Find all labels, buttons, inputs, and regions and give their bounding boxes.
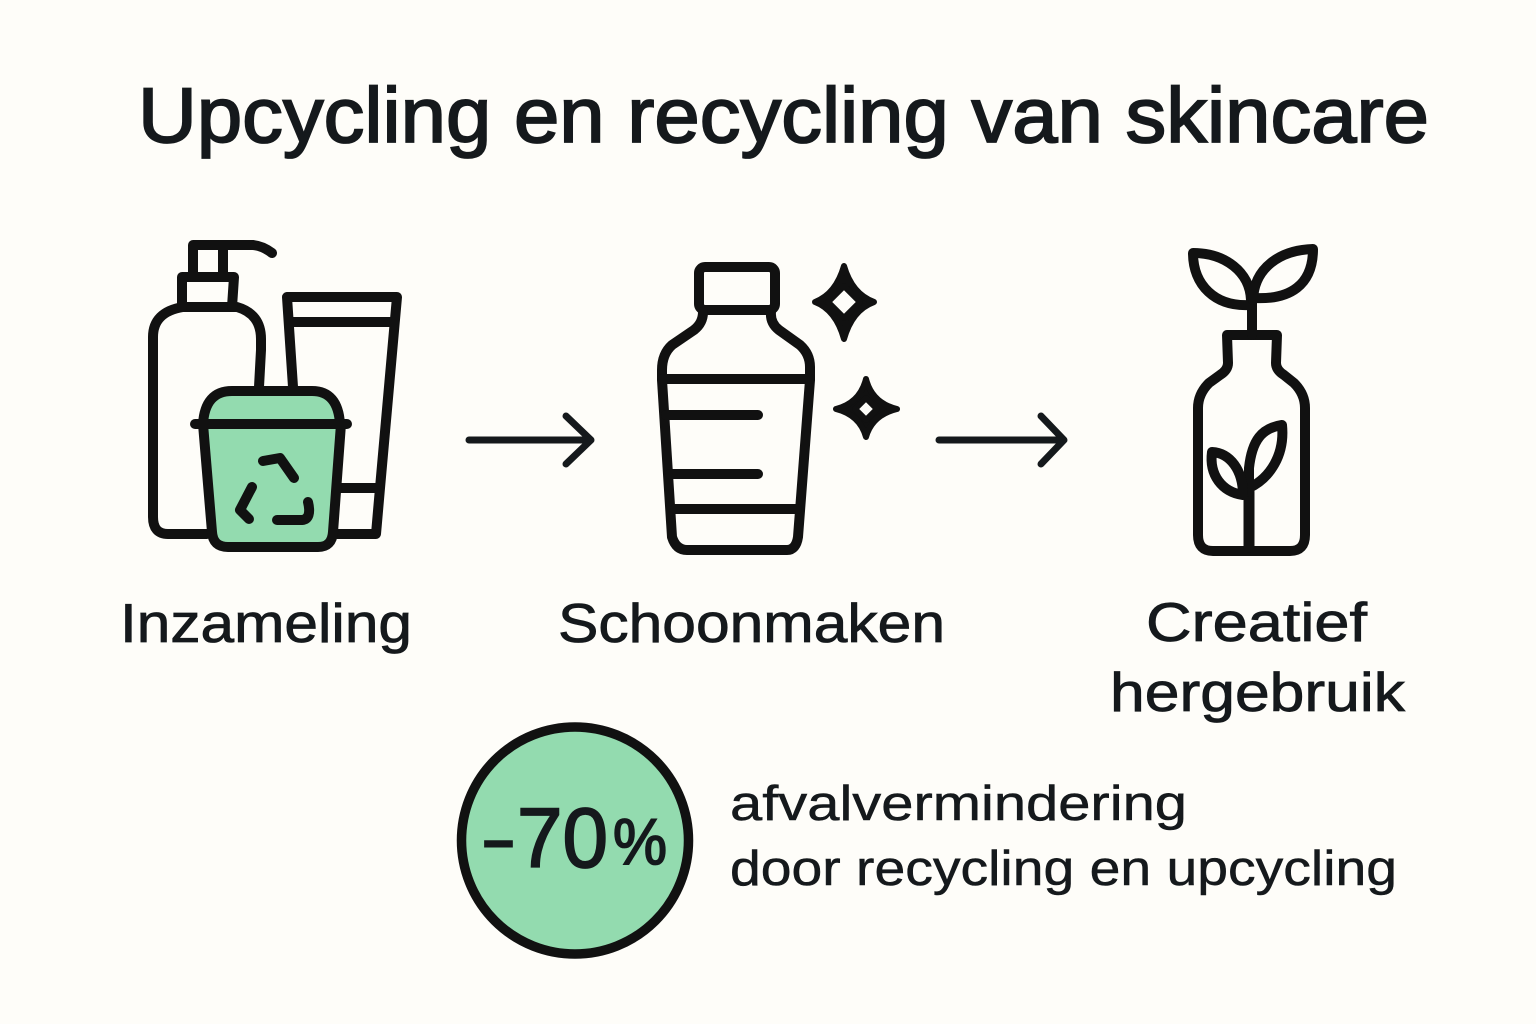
arrow: step 1 to 2: [469, 416, 591, 464]
badge: -70%: 70: [517, 791, 608, 885]
badge: -70%: %: [613, 805, 667, 878]
label: Creatief hergebruik: [1110, 591, 1406, 723]
badge: -70%: –: [486, 814, 511, 867]
arrow: step 2 to 3: [939, 416, 1064, 464]
icon: collection bottles and recycling bin: [153, 245, 397, 547]
label: Schoonmaken: Schoonmaken: [558, 592, 945, 654]
title: Upcycling en recycling van skincare: [138, 71, 1429, 159]
label: Inzameling: Inzameling: [120, 592, 412, 654]
label: Creatief hergebruik: hergebruik: [1110, 661, 1406, 723]
text: waste reduction: [730, 777, 1397, 896]
badge: -70%: [462, 727, 688, 954]
icon: bottle with plant: [1193, 249, 1313, 551]
text: waste reduction: door recycling en upcycling: [730, 842, 1397, 896]
icon: clean bottle with sparkles: [662, 266, 897, 550]
label: Creatief hergebruik: Creatief: [1146, 591, 1368, 653]
text: waste reduction: afvalvermindering: [730, 777, 1187, 831]
sparkle: large: [815, 266, 874, 339]
sparkle: small: [836, 379, 897, 437]
